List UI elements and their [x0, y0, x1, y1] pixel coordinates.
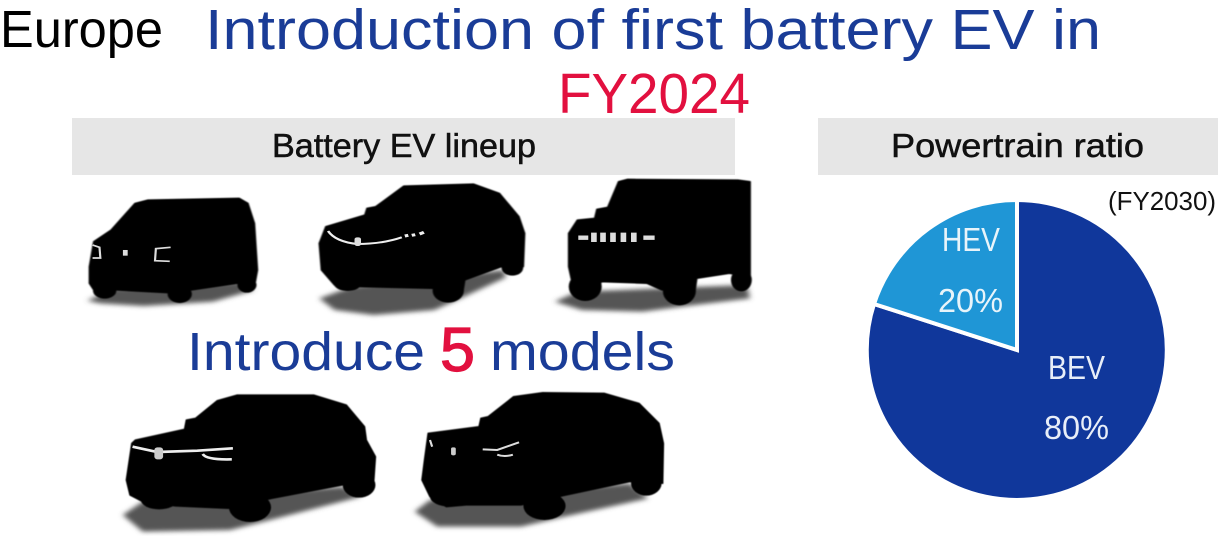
pie slice: HEV 20% — [874, 200, 1017, 350]
heading: Battery EV lineup — [72, 118, 735, 175]
region label: Europe: Europe — [0, 1, 163, 59]
heading: Battery EV lineup: Battery EV lineup — [272, 127, 536, 164]
heading: Powertrain ratio — [818, 118, 1218, 175]
subheading: Introduce 5 models — [187, 316, 675, 385]
car silhouette: van — [87, 198, 257, 306]
heading: Powertrain ratio: Powertrain ratio — [891, 127, 1144, 164]
pie slice: BEV 80% — [867, 200, 1167, 500]
subheading: Introduce 5 models: Introduce — [187, 322, 425, 382]
car silhouette: off-roader — [555, 179, 752, 312]
subheading: Introduce 5 models: models — [490, 322, 675, 382]
note: FY2030: (FY2030) — [1108, 186, 1216, 216]
car silhouette: compact SUV — [415, 393, 663, 527]
pie chart: powertrain ratio — [867, 200, 1167, 500]
car silhouette: SUV with light bar — [123, 395, 375, 532]
subheading: Introduce 5 models: 5 — [440, 316, 475, 385]
pie slice: HEV 20%: HEV — [942, 221, 1000, 258]
title: FY2024: FY2024 — [558, 62, 750, 126]
pie slice: BEV 80%: 80% — [1044, 409, 1109, 446]
car silhouette: crossover — [319, 184, 525, 315]
pie slice: BEV 80%: BEV — [1048, 349, 1105, 386]
pie slice: HEV 20%: 20% — [938, 282, 1003, 319]
